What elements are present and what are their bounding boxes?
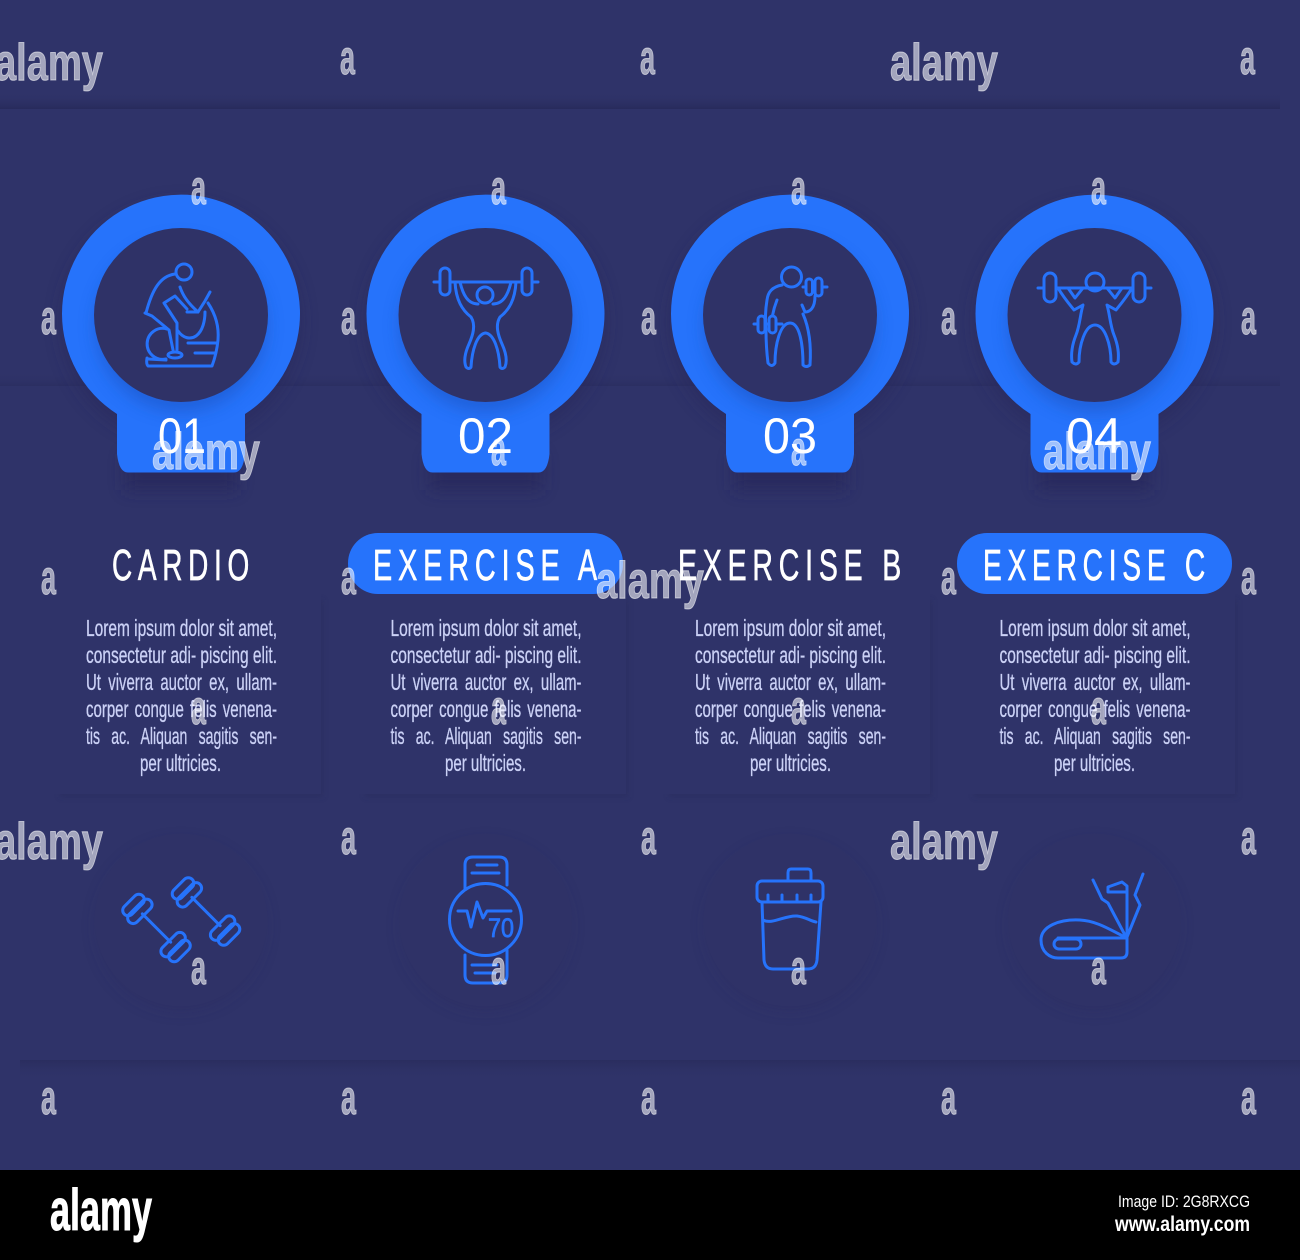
icon: exercise bike xyxy=(145,264,218,366)
icon disc: elliptical trainer xyxy=(1008,834,1181,1008)
icon disc: protein shaker xyxy=(704,834,876,1008)
badge 01: cardio xyxy=(61,195,301,490)
watermark layer: a xyxy=(41,1072,56,1125)
watermark layer: a xyxy=(491,682,506,735)
text block 3: consectetur adi- piscing elit. xyxy=(695,642,886,668)
watermark layer: alamy xyxy=(596,552,704,610)
panel: text card 2 xyxy=(341,536,628,797)
text block 1: tis ac. Aliquan sagitis sen- xyxy=(86,723,277,749)
text block 3 xyxy=(695,615,886,776)
text block 1: Lorem ipsum dolor sit amet, xyxy=(86,615,277,641)
watermark layer: a xyxy=(1091,162,1106,215)
number 03: 03 xyxy=(763,408,817,464)
watermark layer: a xyxy=(340,32,355,85)
text block 3: tis ac. Aliquan sagitis sen- xyxy=(695,723,886,749)
heading pill: exercise c xyxy=(957,533,1232,594)
text block 1: consectetur adi- piscing elit. xyxy=(86,642,277,668)
text block 4: Ut viverra auctor ex, ullam- xyxy=(1000,669,1190,695)
text block 3: Ut viverra auctor ex, ullam- xyxy=(695,669,886,695)
icon: shaker bottle xyxy=(757,869,823,969)
heading: cardio: CARDIO xyxy=(112,541,255,590)
watermark layer: a xyxy=(341,292,356,345)
number 04: 04 xyxy=(1066,408,1122,464)
text block 1: per ultricies. xyxy=(140,750,221,776)
heading pill: exercise a xyxy=(348,533,623,594)
icon: overhead barbell lifter xyxy=(434,268,538,368)
background band shadows xyxy=(0,92,1300,1080)
watermark layer: a xyxy=(791,162,806,215)
icon disc: dumbbells xyxy=(94,834,268,1008)
badge 02: exercise a xyxy=(366,195,606,490)
text block 2: corper congue felis venena- xyxy=(390,696,582,722)
icon: heart rate watch xyxy=(450,857,522,983)
watermark layer: a xyxy=(1241,812,1256,865)
watermark layer: a xyxy=(941,292,956,345)
number 01: 01 xyxy=(158,408,206,464)
heading: exercise b: EXERCISE B xyxy=(678,541,907,590)
text block 2: Lorem ipsum dolor sit amet, xyxy=(390,615,582,641)
text block 2: per ultricies. xyxy=(445,750,526,776)
text block 2: Ut viverra auctor ex, ullam- xyxy=(390,669,582,695)
website: www.alamy.com xyxy=(1114,1213,1250,1236)
watermark layer: a xyxy=(341,812,356,865)
watermark layer: a xyxy=(640,32,655,85)
watermark layer: a xyxy=(641,812,656,865)
badge 04: exercise c xyxy=(974,195,1214,490)
text block 1: corper congue felis venena- xyxy=(86,696,277,722)
watermark layer: a xyxy=(191,682,206,735)
watermark layer: a xyxy=(641,292,656,345)
footer bar xyxy=(0,1170,1300,1260)
text block 4 xyxy=(1000,615,1190,776)
text block 4: consectetur adi- piscing elit. xyxy=(1000,642,1190,668)
watermark layer: a xyxy=(1241,292,1256,345)
number 02: 02 xyxy=(458,408,513,464)
icon: dumbbell curl xyxy=(754,267,827,366)
text block 1 xyxy=(86,615,277,776)
watermark layer: alamy xyxy=(890,34,998,92)
icon disc: smart watch xyxy=(399,834,572,1008)
watermark layer: alamy xyxy=(152,423,260,481)
text block 2: consectetur adi- piscing elit. xyxy=(390,642,582,668)
watermark layer: alamy xyxy=(890,813,998,871)
watermark layer: alamy xyxy=(1043,423,1151,481)
panel: text card 4 xyxy=(950,536,1237,797)
watermark layer: a xyxy=(191,162,206,215)
watermark layer: a xyxy=(491,162,506,215)
text block 3: corper congue felis venena- xyxy=(695,696,886,722)
watermark layer: a xyxy=(641,1072,656,1125)
heading pill: exercise a: EXERCISE A xyxy=(373,541,603,590)
text block 2 xyxy=(390,615,582,776)
text block 1: Ut viverra auctor ex, ullam- xyxy=(86,669,277,695)
icon: heart rate watch: 70 xyxy=(488,913,514,943)
icon: back squat xyxy=(1038,273,1151,364)
icon: elliptical machine xyxy=(1041,874,1143,958)
watermark layer: a xyxy=(1091,682,1106,735)
watermark layer: a xyxy=(341,552,356,605)
image id: Image ID: 2G8RXCG xyxy=(1118,1192,1250,1211)
footer logo: alamy xyxy=(50,1178,152,1243)
text block 3: Lorem ipsum dolor sit amet, xyxy=(695,615,886,641)
watermark layer: a xyxy=(41,552,56,605)
watermark layer: a xyxy=(791,942,806,995)
text block 4: per ultricies. xyxy=(1054,750,1135,776)
text block 4: Lorem ipsum dolor sit amet, xyxy=(1000,615,1190,641)
watermark layer: a xyxy=(941,552,956,605)
text block 2: tis ac. Aliquan sagitis sen- xyxy=(390,723,582,749)
watermark layer: a xyxy=(941,1072,956,1125)
watermark layer: a xyxy=(791,682,806,735)
watermark layer: a xyxy=(191,942,206,995)
watermark layer: a xyxy=(1091,942,1106,995)
watermark layer: a xyxy=(1240,32,1255,85)
watermark layer: a xyxy=(491,942,506,995)
panel: text card 3 xyxy=(645,536,932,797)
watermark layer: a xyxy=(41,292,56,345)
panel: text card 1 xyxy=(36,536,323,797)
watermark layer: a xyxy=(341,1072,356,1125)
watermark layer: a xyxy=(491,423,506,476)
badge 03: exercise b xyxy=(670,195,910,490)
icon: two dumbbells xyxy=(119,874,243,965)
watermark layer: a xyxy=(791,423,806,476)
text block 4: corper congue felis venena- xyxy=(1000,696,1190,722)
text block 3: per ultricies. xyxy=(750,750,831,776)
watermark layer: a xyxy=(1241,552,1256,605)
watermark layer: a xyxy=(1241,1072,1256,1125)
